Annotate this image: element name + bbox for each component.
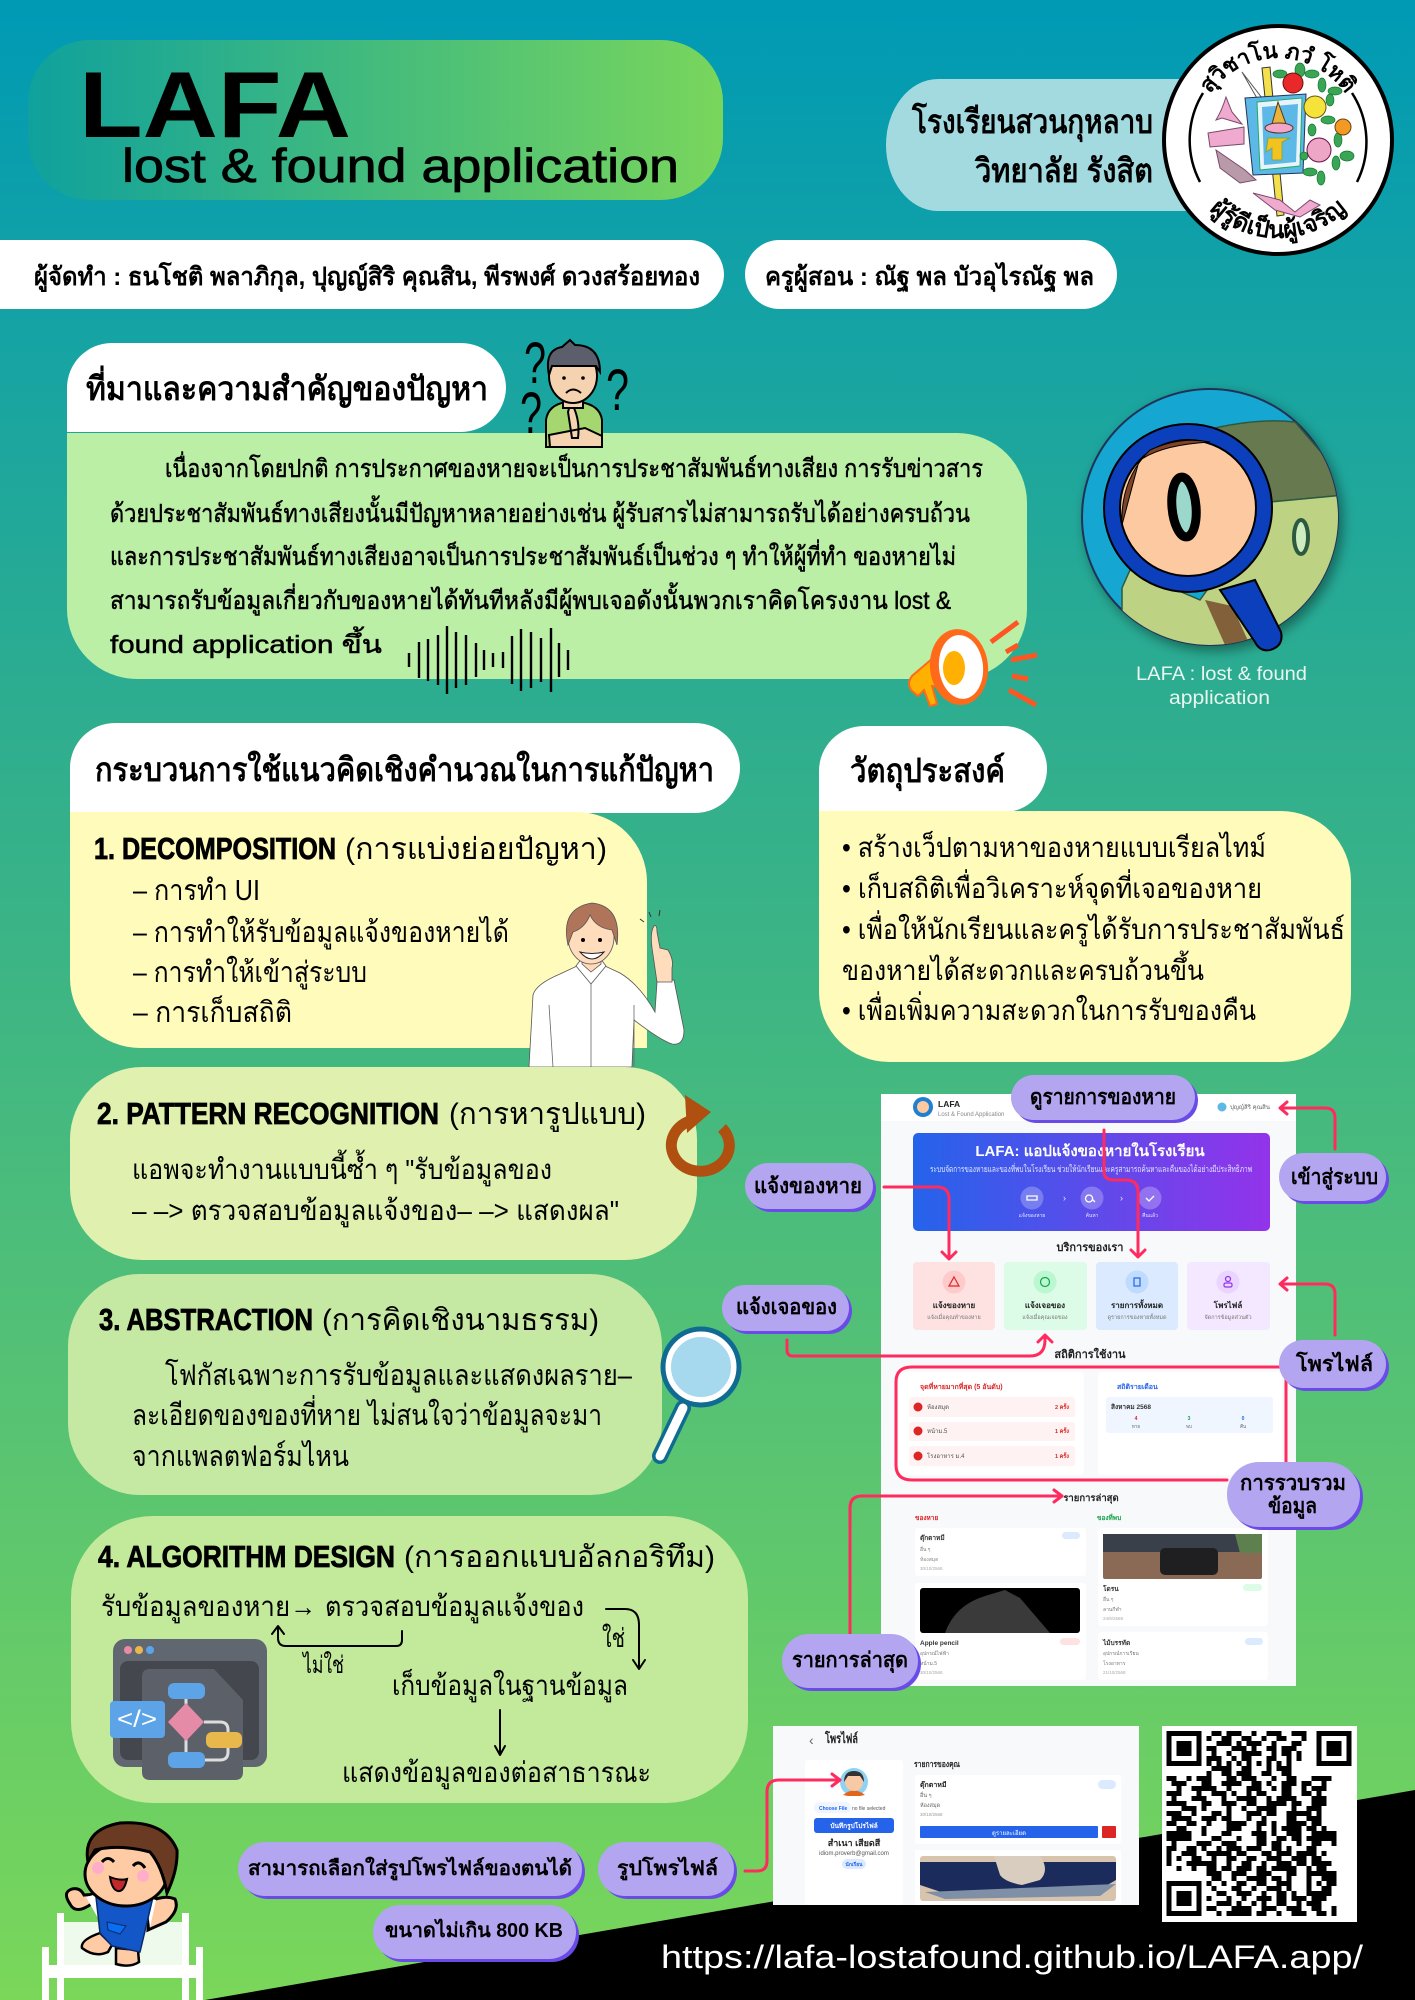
panel: 3 abstraction	[68, 1274, 662, 1495]
arrow: report lost	[884, 1187, 956, 1259]
service cards: แจ้งเมื่อคุณเจอของ	[1022, 1313, 1068, 1321]
boy arms	[66, 1889, 176, 1930]
pencil case photo	[920, 1856, 1116, 1901]
screenshot: profile page: บันทึกรูปโปรไฟล์	[830, 1821, 878, 1831]
panel: 1 decomposition: – การทำให้รับข้อมูลแจ้งของหายได้	[133, 915, 509, 950]
arrow: profile	[1280, 1278, 1335, 1335]
QR code	[1162, 1726, 1357, 1922]
panel: 4 algorithm design: ตรวจสอบข้อมูลแจ้งของ	[325, 1591, 584, 1624]
heading: objectives: วัตถุประสงค์	[850, 752, 1005, 792]
screenshot: main app page: สถิติการใช้งาน	[1054, 1347, 1126, 1361]
screenshot: profile page: Choose File	[819, 1806, 848, 1812]
hero banner: ›	[1120, 1193, 1123, 1203]
hero banner: ค้นหา	[1086, 1212, 1099, 1219]
panel: 3 abstraction: (การคิดเชิงนามธรรม)	[322, 1304, 599, 1337]
connectors between labels and screenshot	[787, 1102, 1335, 1634]
screenshot: profile page: ตุ๊กตาหมี	[920, 1780, 947, 1789]
latest items: 24/8/2568	[1103, 1616, 1124, 1621]
arrow: profile picture	[745, 1774, 840, 1871]
title banner: lost & found application	[122, 139, 679, 192]
panel: 3 abstraction: โฟกัสเฉพาะการรับข้อมูลและแสดงผลราย–	[165, 1358, 633, 1393]
teacher bar: ครูผู้สอน : ณัฐ พล บัวอุไรณัฐ พล	[765, 261, 1094, 293]
label: view lost list	[1011, 1075, 1198, 1123]
label: login: เข้าสู่ระบบ	[1291, 1165, 1378, 1191]
label: data collection: การรวบรวม	[1240, 1472, 1346, 1495]
stats cards: 1 ครั้ง	[1055, 1451, 1069, 1460]
stats cards: สถิติรายเดือน	[1117, 1383, 1158, 1391]
heading: background of the problem	[67, 343, 506, 432]
screenshot: profile page: idiom.proverb@gmail.com	[819, 1851, 889, 1857]
arrow: down	[495, 1710, 505, 1755]
avatar	[840, 1768, 868, 1796]
panel: 4 algorithm design: ใช่	[602, 1623, 625, 1653]
illustration: man pointing up	[529, 903, 684, 1067]
screenshot: profile page: 30/10/2568	[920, 1812, 943, 1817]
label: report lost: แจ้งของหาย	[754, 1174, 862, 1198]
screenshot: profile page: สำเนา เสียดสี	[828, 1838, 881, 1848]
screenshot: main app page: บริการของเรา	[1057, 1241, 1123, 1254]
latest items: 30/10/2568	[920, 1670, 943, 1675]
latest items: ตุ๊กตาหมี	[920, 1534, 945, 1542]
icon: flowchart window: </>	[117, 1706, 157, 1733]
teacher bar	[745, 240, 1117, 309]
arrow: view list	[1104, 1130, 1145, 1257]
panel: 1 decomposition	[70, 812, 647, 1048]
latest items: อื่น ๆ	[1103, 1596, 1114, 1603]
icon: magnifying glass	[660, 1329, 739, 1456]
service cards: รายการทั้งหมด	[1111, 1299, 1163, 1310]
latest items: 30/10/2568	[920, 1566, 943, 1571]
latest items: ลานกีฬา	[1103, 1606, 1122, 1613]
title banner	[28, 40, 723, 200]
service cards: แจ้งของหาย	[933, 1300, 976, 1310]
latest items: อื่น ๆ	[920, 1546, 931, 1553]
hero banner: คืนแล้ว	[1142, 1212, 1158, 1219]
latest items	[915, 1528, 1268, 1680]
panel: 4 algorithm design: แสดงข้อมูลของต่อสาธารณะ	[342, 1757, 651, 1790]
panel: background text: และการประชาสัมพันธ์ทางเสียงอาจเป็นการประชาสัมพันธ์เป็นช่วง ๆ ทำให้ผู้ที่ทำ ของหายไม่	[110, 539, 956, 572]
label: login	[1279, 1153, 1389, 1204]
authors bar	[0, 240, 724, 309]
latest items: ห้องสมุด	[920, 1556, 938, 1563]
panel: 4 algorithm design: 4. ALGORITHM DESIGN	[98, 1539, 395, 1574]
stats cards: 3	[1188, 1416, 1191, 1422]
label: profile: โพรไฟล์	[1295, 1351, 1373, 1376]
panel: 1 decomposition: – การทำให้เข้าสู่ระบบ	[133, 955, 367, 990]
black footer wedge	[205, 1790, 1415, 2000]
latest items: Apple pencil	[920, 1640, 959, 1647]
label: size limit: ขนาดไม่เกิน 800 KB	[385, 1918, 563, 1942]
panel: 4 algorithm design	[71, 1516, 748, 1803]
panel: objectives: • เพื่อให้นักเรียนและครูได้รับการประชาสัมพันธ์	[842, 910, 1345, 947]
logo: LAFA magnifier character: application	[1169, 688, 1270, 709]
hero banner: ระบบจัดการของหายและของที่พบในโรงเรียน ช่วยให้นักเรียนและครูสามารถค้นหาและคืนของได้อย่างมีประสิทธิภาพ	[930, 1162, 1252, 1175]
stats cards	[899, 1372, 1282, 1475]
heading: objectives	[819, 726, 1047, 812]
label: report lost	[745, 1163, 876, 1212]
hero banner	[913, 1133, 1270, 1231]
screenshot: profile page: ห้องสมุด	[920, 1802, 941, 1809]
screenshot: profile page: โพรไฟล์	[824, 1730, 858, 1746]
label: latest list	[782, 1634, 921, 1691]
panel: objectives: ของหายได้สะดวกและครบถ้วนขึ้น	[842, 950, 1204, 986]
panel: background text: สามารถรับข้อมูลเกี่ยวกับของหายได้ทันทีหลังมีผู้พบเจอดังนั้นพวกเราคิดโครงงาน lost &	[110, 582, 951, 616]
label: data collection	[1227, 1462, 1363, 1530]
panel: 2 pattern recognition	[70, 1067, 697, 1260]
school name pill: โรงเรียนสวนกุหลาบ	[911, 102, 1153, 143]
screenshot: profile page: ‹	[809, 1732, 814, 1748]
boy head	[85, 1842, 167, 1906]
school name pill	[886, 79, 1200, 211]
title banner: LAFA	[79, 52, 351, 157]
label: choose profile picture: สามารถเลือกใส่รูปโพรไฟล์ของตนได้	[248, 1856, 572, 1882]
panel: 1 decomposition: 1. DECOMPOSITION	[94, 831, 336, 866]
service cards: แจ้งเจอของ	[1025, 1300, 1065, 1310]
stats cards: หาย	[1132, 1424, 1140, 1429]
stats cards: คืน	[1240, 1423, 1246, 1429]
authors bar: ผู้จัดทำ : ธนโชติ พลาภิกุล, ปุญญ์สิริ คุณสิน, พีรพงศ์ ดวงสร้อยทอง	[34, 261, 700, 293]
service cards: จัดการข้อมูลส่วนตัว	[1204, 1314, 1252, 1321]
hero banner: ›	[1063, 1193, 1066, 1203]
arrow: login	[1280, 1102, 1335, 1149]
logo: LAFA magnifier character: LAFA : lost & found	[1136, 664, 1307, 685]
hero banner: แจ้งของหาย	[1019, 1212, 1045, 1219]
stats cards: 4	[1135, 1416, 1138, 1422]
panel: background text: found application ขึ้น	[110, 626, 382, 659]
stats cards: 0	[1242, 1416, 1245, 1422]
heading: background of the problem: ที่มาและความสำคัญของปัญหา	[86, 365, 488, 408]
screenshot: main app page: Lost & Found Application	[938, 1112, 1004, 1118]
screenshot: profile page: ดูรายละเอียด	[992, 1829, 1026, 1837]
screenshot: main app page	[881, 1094, 1296, 1686]
screenshot: main app page: ของที่พบ	[1097, 1512, 1121, 1522]
school seal	[1162, 24, 1394, 256]
label: view lost list: ดูรายการของหาย	[1030, 1086, 1176, 1111]
panel: 4 algorithm design: รับข้อมูลของหาย→	[101, 1591, 316, 1624]
latest items: โรงอาหาร	[1103, 1660, 1126, 1667]
bracket: data collection	[896, 1367, 1286, 1480]
label: profile picture	[598, 1842, 737, 1899]
stats cards: 2 ครั้ง	[1055, 1402, 1069, 1411]
school seal: สุวิชาโน ภวํ โหติ	[1202, 40, 1358, 94]
label: choose profile picture	[238, 1842, 585, 1899]
icon: thinking person: ?	[524, 331, 546, 396]
arrow: latest list	[850, 1490, 1062, 1634]
icon: thinking person: ?	[520, 381, 542, 446]
icon: thinking person	[520, 331, 629, 447]
screenshot: profile page: no file selected	[852, 1806, 886, 1812]
boy overalls	[96, 1897, 153, 1952]
illustration: boy on bench	[42, 1823, 203, 2000]
panel: 1 decomposition: – การทำ UI	[133, 875, 260, 907]
icon: flowchart window	[110, 1639, 267, 1780]
latest items: โดรน	[1102, 1584, 1119, 1593]
label: profile	[1279, 1340, 1389, 1391]
label: report found	[722, 1285, 852, 1334]
panel: 3 abstraction: จากแพลตฟอร์มไหน	[132, 1439, 349, 1473]
screenshot: profile page: นักเรียน	[845, 1861, 863, 1868]
label: size limit	[373, 1905, 579, 1962]
label: latest list: รายการล่าสุด	[792, 1649, 908, 1674]
stats cards: หน้าม.5	[927, 1428, 948, 1435]
screenshot: profile page: อื่น ๆ	[920, 1791, 932, 1799]
latest items: ไม้บรรทัด	[1102, 1638, 1130, 1647]
label: profile picture: รูปโพรไฟล์	[617, 1856, 718, 1882]
panel: 4 algorithm design: ไม่ใช่	[302, 1651, 344, 1679]
latest items: อุปกรณ์ไฟฟ้า	[920, 1650, 949, 1657]
icon: refresh arrow	[671, 1095, 729, 1171]
panel: 2 pattern recognition: (การหารูปแบบ)	[449, 1098, 646, 1132]
arrow: yes	[606, 1609, 645, 1669]
panel: 4 algorithm design: (การออกแบบอัลกอริทึม)	[404, 1541, 715, 1574]
school seal: ผู้รู้ดีเป็นผู้เจริญ	[1210, 198, 1348, 244]
stats cards: โรงอาหาร ม.4	[927, 1452, 965, 1460]
screenshot: profile page: รายการของคุณ	[914, 1759, 960, 1770]
heading: computational thinking: กระบวนการใช้แนวคิดเชิงคำนวณในการแก้ปัญหา	[95, 750, 714, 789]
website URL: https://lafa-lostafound.github.io/LAFA.app/	[661, 1939, 1363, 1975]
panel: 4 algorithm design: เก็บข้อมูลในฐานข้อมูล	[392, 1668, 628, 1703]
panel: objectives: • เก็บสถิติเพื่อวิเคราะห์จุดที่เจอของหาย	[842, 869, 1262, 906]
icon: megaphone	[909, 622, 1037, 708]
service cards: โพรไฟล์	[1213, 1300, 1242, 1310]
stats cards: ห้องสมุด	[927, 1404, 949, 1411]
panel: background text: เนื่องจากโดยปกติ การประกาศของหายจะเป็นการประชาสัมพันธ์ทางเสียง การรับข่าวสาร	[165, 451, 983, 483]
stats cards: สิงหาคม 2568	[1111, 1403, 1151, 1411]
panel: background text: ด้วยประชาสัมพันธ์ทางเสียงนั้นมีปัญหาหลายอย่างเช่น ผู้รับสารไม่สามารถรับได้อย่างครบถ้วน	[110, 495, 970, 529]
icon: sound wave	[409, 626, 568, 694]
boy legs	[82, 1933, 139, 1966]
screenshot: main app page: LAFA	[938, 1099, 960, 1109]
service cards	[913, 1262, 1270, 1330]
panel: 2 pattern recognition: – –> ตรวจสอบข้อมูลแจ้งของ– –> แสดงผล"	[132, 1195, 619, 1228]
panel: objectives	[819, 811, 1351, 1062]
logo: LAFA magnifier character	[1082, 389, 1345, 709]
stats cards: 1 ครั้ง	[1055, 1426, 1069, 1435]
arrow: no	[272, 1626, 402, 1646]
panel: 1 decomposition: – การเก็บสถิติ	[133, 994, 292, 1029]
screenshot: main app page: ปุญญ์สิริ คุณสิน	[1230, 1103, 1270, 1111]
icon: thinking person: ?	[606, 358, 629, 423]
screenshot: main app page: ของหาย	[915, 1515, 938, 1522]
panel: 3 abstraction: 3. ABSTRACTION	[99, 1302, 313, 1337]
arrow: report found	[787, 1335, 1052, 1356]
panel: 3 abstraction: ละเอียดของของที่หาย ไม่สนใจว่าข้อมูลจะมา	[132, 1395, 602, 1433]
stats cards: จุดที่หายมากที่สุด (5 อันดับ)	[920, 1381, 1003, 1391]
screenshot: profile page	[773, 1726, 1139, 1905]
panel: objectives: • เพื่อเพิ่มความสะดวกในการรับของคืน	[842, 991, 1256, 1026]
latest items: 21/10/2568	[1103, 1670, 1126, 1675]
heading: computational thinking	[70, 723, 740, 813]
panel: 2 pattern recognition: 2. PATTERN RECOGNITION	[97, 1096, 439, 1131]
panel: background text	[67, 433, 1027, 679]
screenshot: main app page: รายการล่าสุด	[1063, 1493, 1119, 1504]
service cards: ดูรายการของหายทั้งหมด	[1107, 1313, 1167, 1321]
school name pill: วิทยาลัย รังสิต	[975, 152, 1153, 189]
panel: objectives: • สร้างเว็ปตามหาของหายแบบเรียลไทม์	[842, 830, 1266, 863]
panel: 1 decomposition: (การแบ่งย่อยปัญหา)	[345, 833, 607, 866]
stats cards: พบ	[1186, 1424, 1192, 1429]
hero banner: LAFA: แอปแจ้งของหายในโรงเรียน	[975, 1141, 1205, 1160]
latest items: อุปกรณ์การเรียน	[1103, 1650, 1139, 1657]
panel: 2 pattern recognition: แอพจะทำงานแบบนี้ซ้ำ ๆ "รับข้อมูลของ	[132, 1149, 552, 1187]
latest items: หน้าม.5	[920, 1660, 937, 1667]
label: report found: แจ้งเจอของ	[736, 1295, 837, 1319]
service cards: แจ้งเมื่อคุณทำของหาย	[927, 1313, 981, 1321]
label: data collection: ข้อมูล	[1268, 1494, 1317, 1520]
